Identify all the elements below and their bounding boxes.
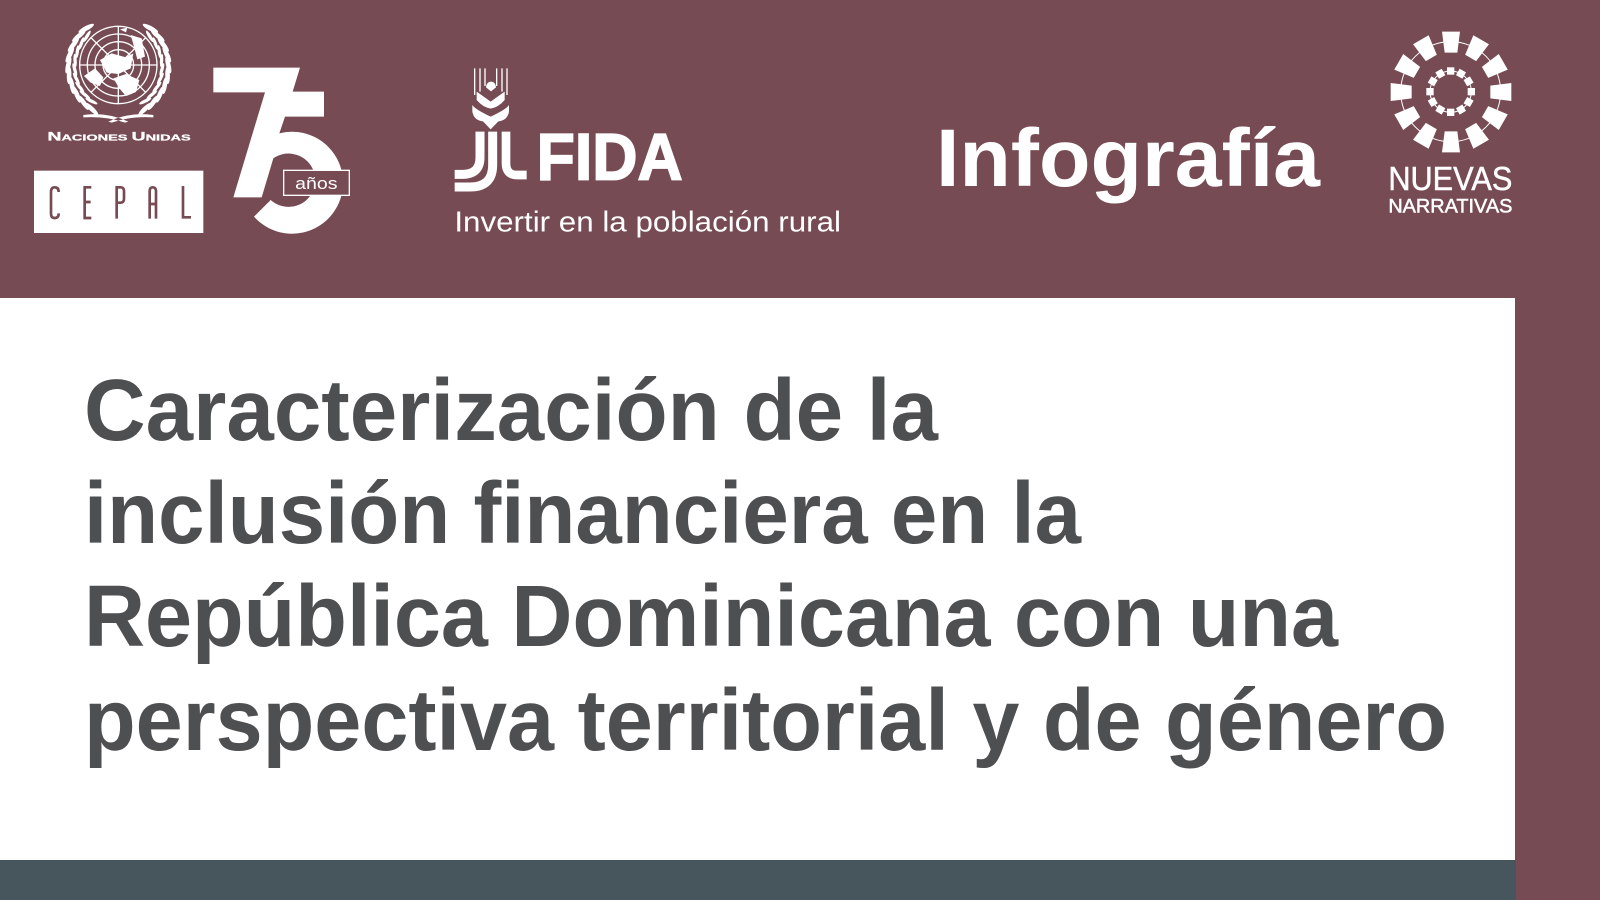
logo: 75 años	[213, 68, 349, 234]
wordmark: FIDA: FIDA	[537, 119, 683, 193]
panel: white title area	[0, 298, 1515, 860]
footer band: slate	[0, 860, 1516, 900]
tagline: Invertir en la población rural	[454, 207, 841, 239]
label: Naciones Unidas: NACIONES UNIDAS	[47, 130, 191, 143]
icon: wheat	[472, 68, 509, 129]
title: Caracterización de la	[84, 362, 939, 459]
CEPAL box: CEPAL	[118, 212, 120, 213]
title	[84, 362, 1447, 769]
CEPAL box	[34, 171, 203, 233]
logo: Nuevas Narrativas	[1388, 32, 1512, 217]
title: República Dominicana con una	[84, 568, 1339, 665]
logo: Naciones Unidas and CEPAL 75	[34, 22, 349, 234]
title: perspectiva territorial y de género	[84, 672, 1447, 769]
logo: 75 años: años	[295, 174, 337, 193]
heading: Infografía: Infografía	[936, 113, 1321, 204]
wordmark: Narrativas: NARRATIVAS	[1388, 196, 1512, 217]
icon: JJL mark	[455, 132, 527, 187]
title: inclusión financiera en la	[84, 465, 1082, 562]
wordmark: Nuevas: NUEVAS	[1388, 161, 1512, 198]
logo: FIDA	[454, 68, 841, 239]
icon: UN emblem	[64, 22, 173, 123]
icon: ring of blocks	[1391, 32, 1511, 152]
